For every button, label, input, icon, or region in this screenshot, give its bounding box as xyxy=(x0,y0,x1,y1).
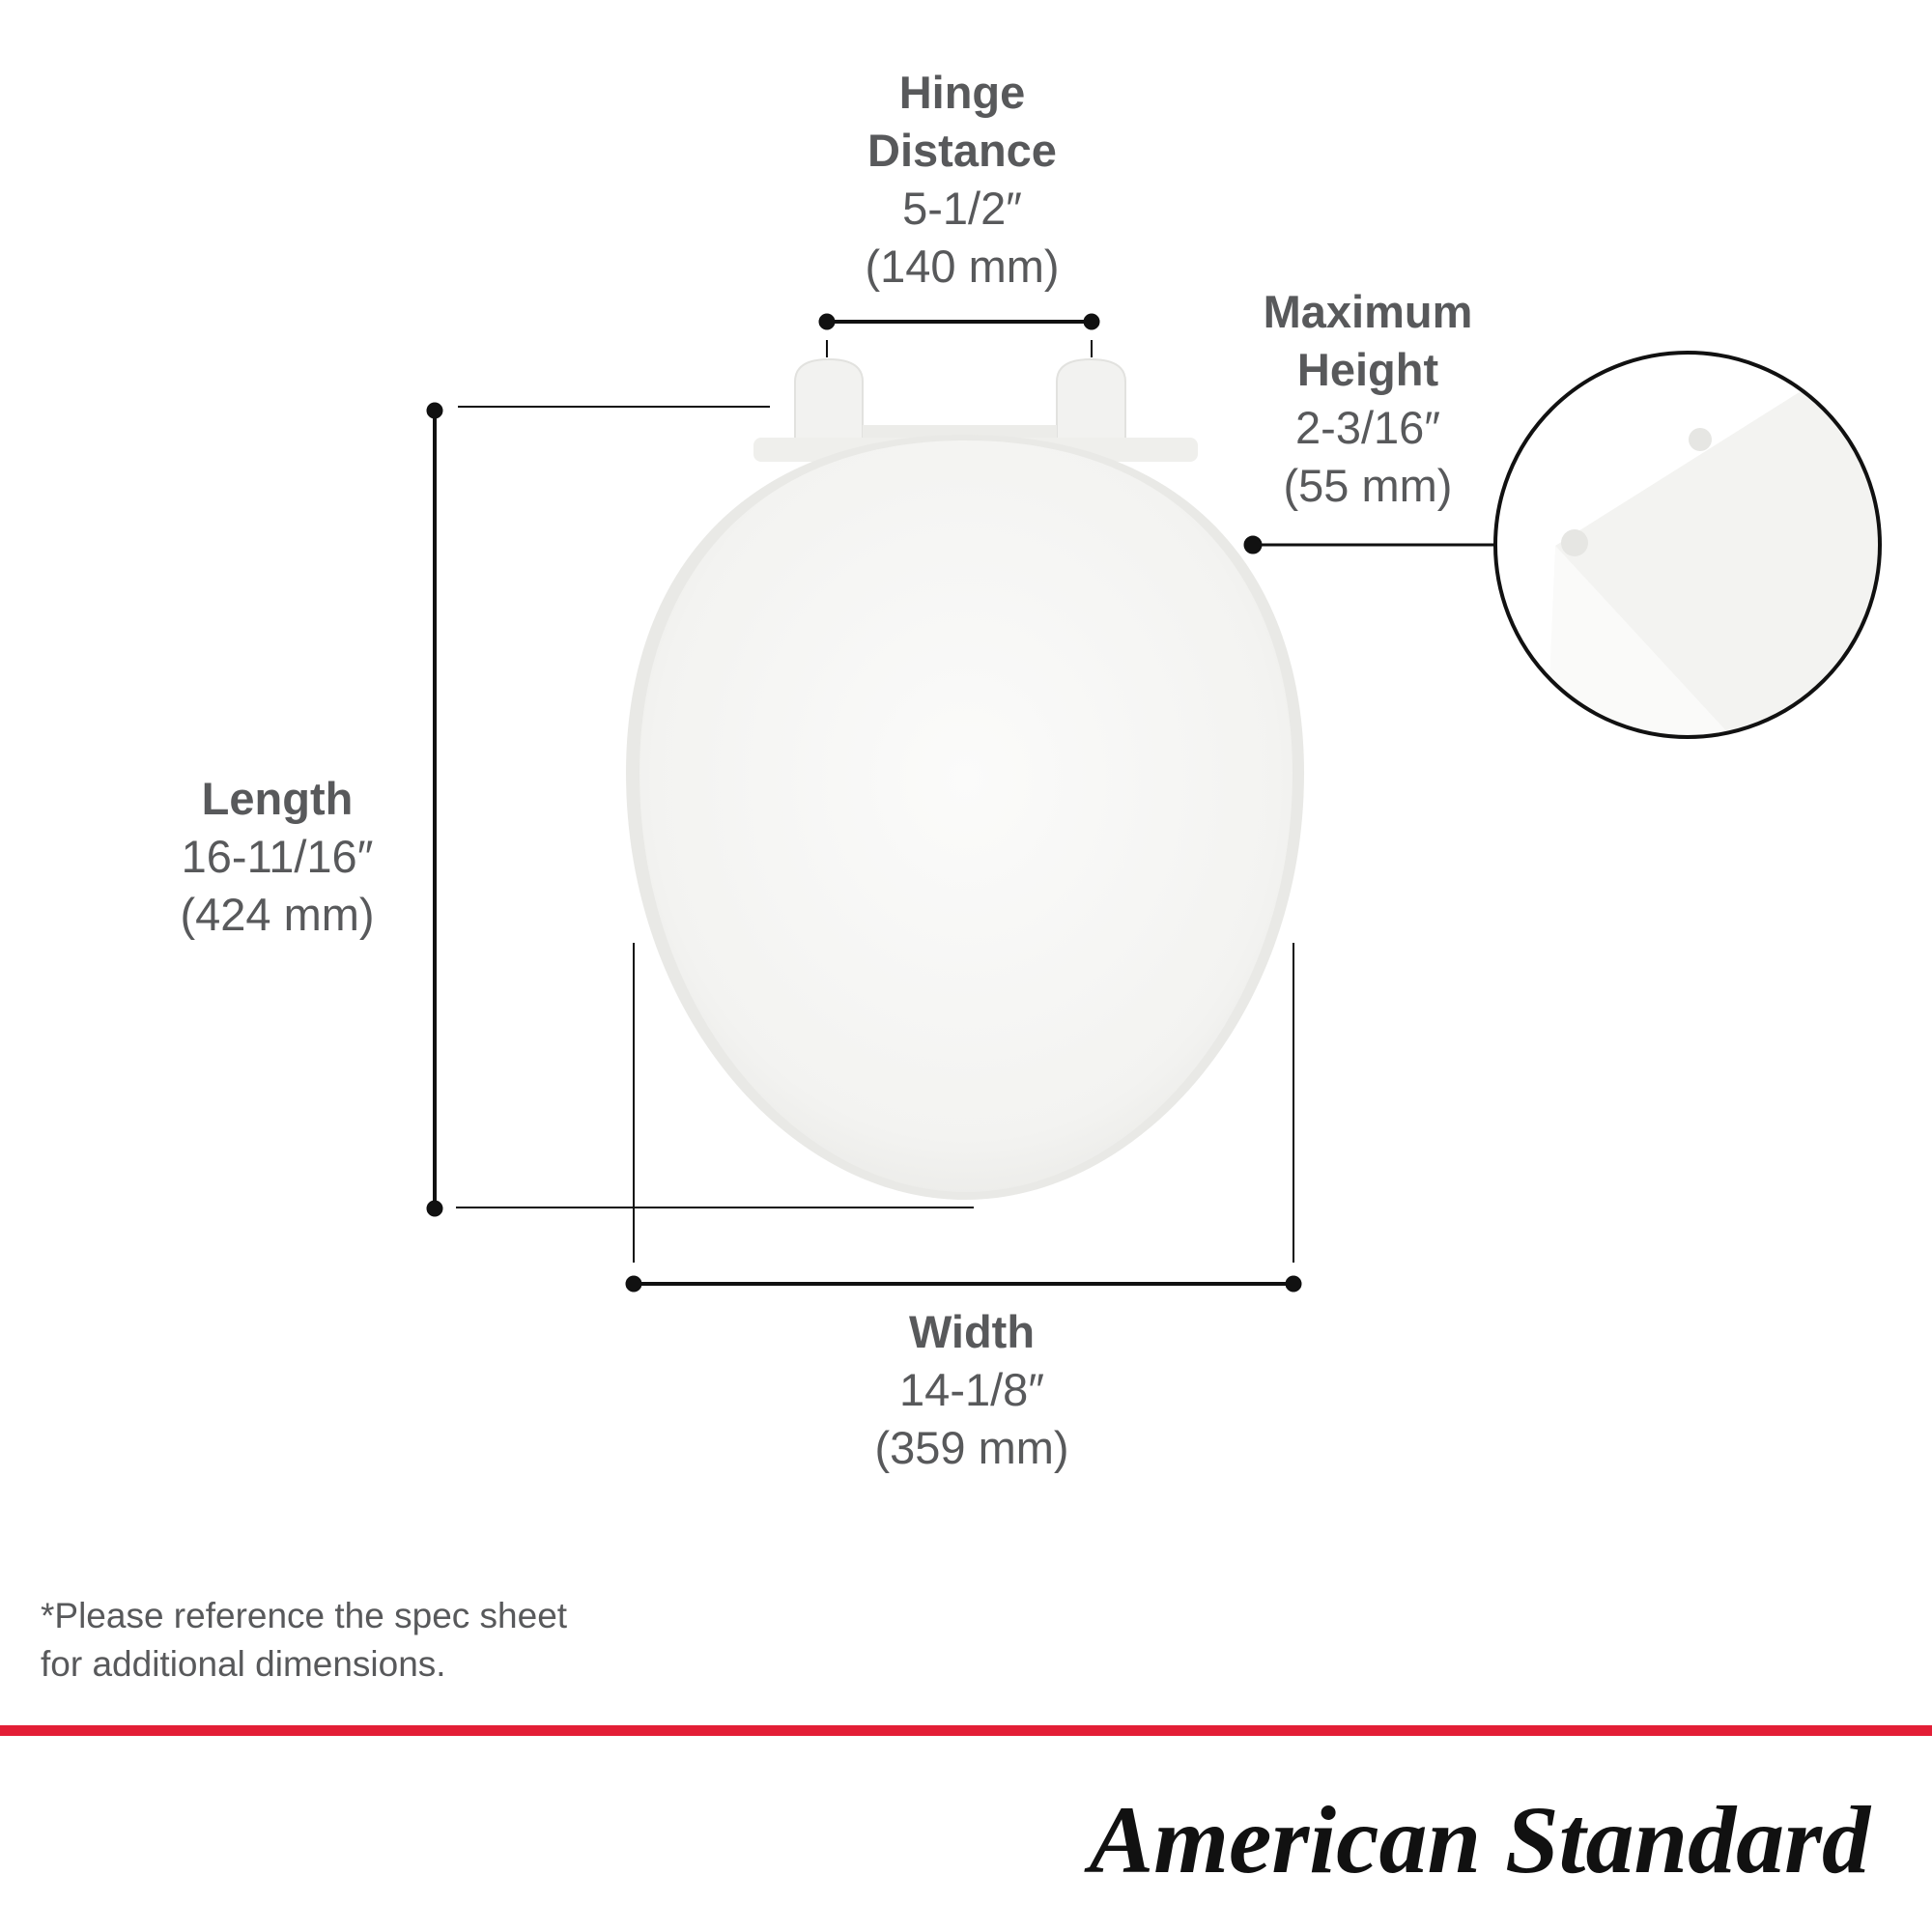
width label: 14-1/8″ xyxy=(899,1364,1044,1415)
length label: Length xyxy=(202,773,353,824)
length label: 16-11/16″ xyxy=(182,831,373,882)
hinge distance label: (140 mm) xyxy=(865,241,1060,292)
hinge distance label xyxy=(865,67,1060,292)
length label: (424 mm) xyxy=(180,889,375,940)
toilet seat xyxy=(626,359,1304,1200)
footnote xyxy=(41,1596,567,1684)
hinge distance label: Hinge xyxy=(899,67,1025,118)
maximum height label: (55 mm) xyxy=(1284,460,1452,511)
hinge distance label: Distance xyxy=(867,125,1057,176)
hinge distance label: 5-1/2″ xyxy=(902,183,1022,234)
red divider xyxy=(0,1725,1932,1736)
maximum height label: Maximum xyxy=(1264,286,1472,337)
footnote: *Please reference the spec sheet xyxy=(41,1596,567,1635)
detail circle xyxy=(1493,351,1882,739)
logo: American Standard xyxy=(1090,1786,1870,1893)
width label: Width xyxy=(909,1306,1035,1357)
hinge dimension line xyxy=(819,314,1099,357)
maximum height label xyxy=(1264,286,1472,511)
length dimension line xyxy=(427,403,974,1216)
drawing: seat and dimension lines xyxy=(0,313,1932,1736)
footnote: for additional dimensions. xyxy=(41,1644,446,1684)
width label xyxy=(874,1306,1069,1473)
maximum height label: Height xyxy=(1297,344,1438,395)
width label: (359 mm) xyxy=(874,1422,1069,1473)
width dimension line xyxy=(626,943,1301,1292)
maximum height label: 2-3/16″ xyxy=(1295,402,1440,453)
max height callout line xyxy=(1244,536,1496,554)
length label xyxy=(180,773,375,940)
